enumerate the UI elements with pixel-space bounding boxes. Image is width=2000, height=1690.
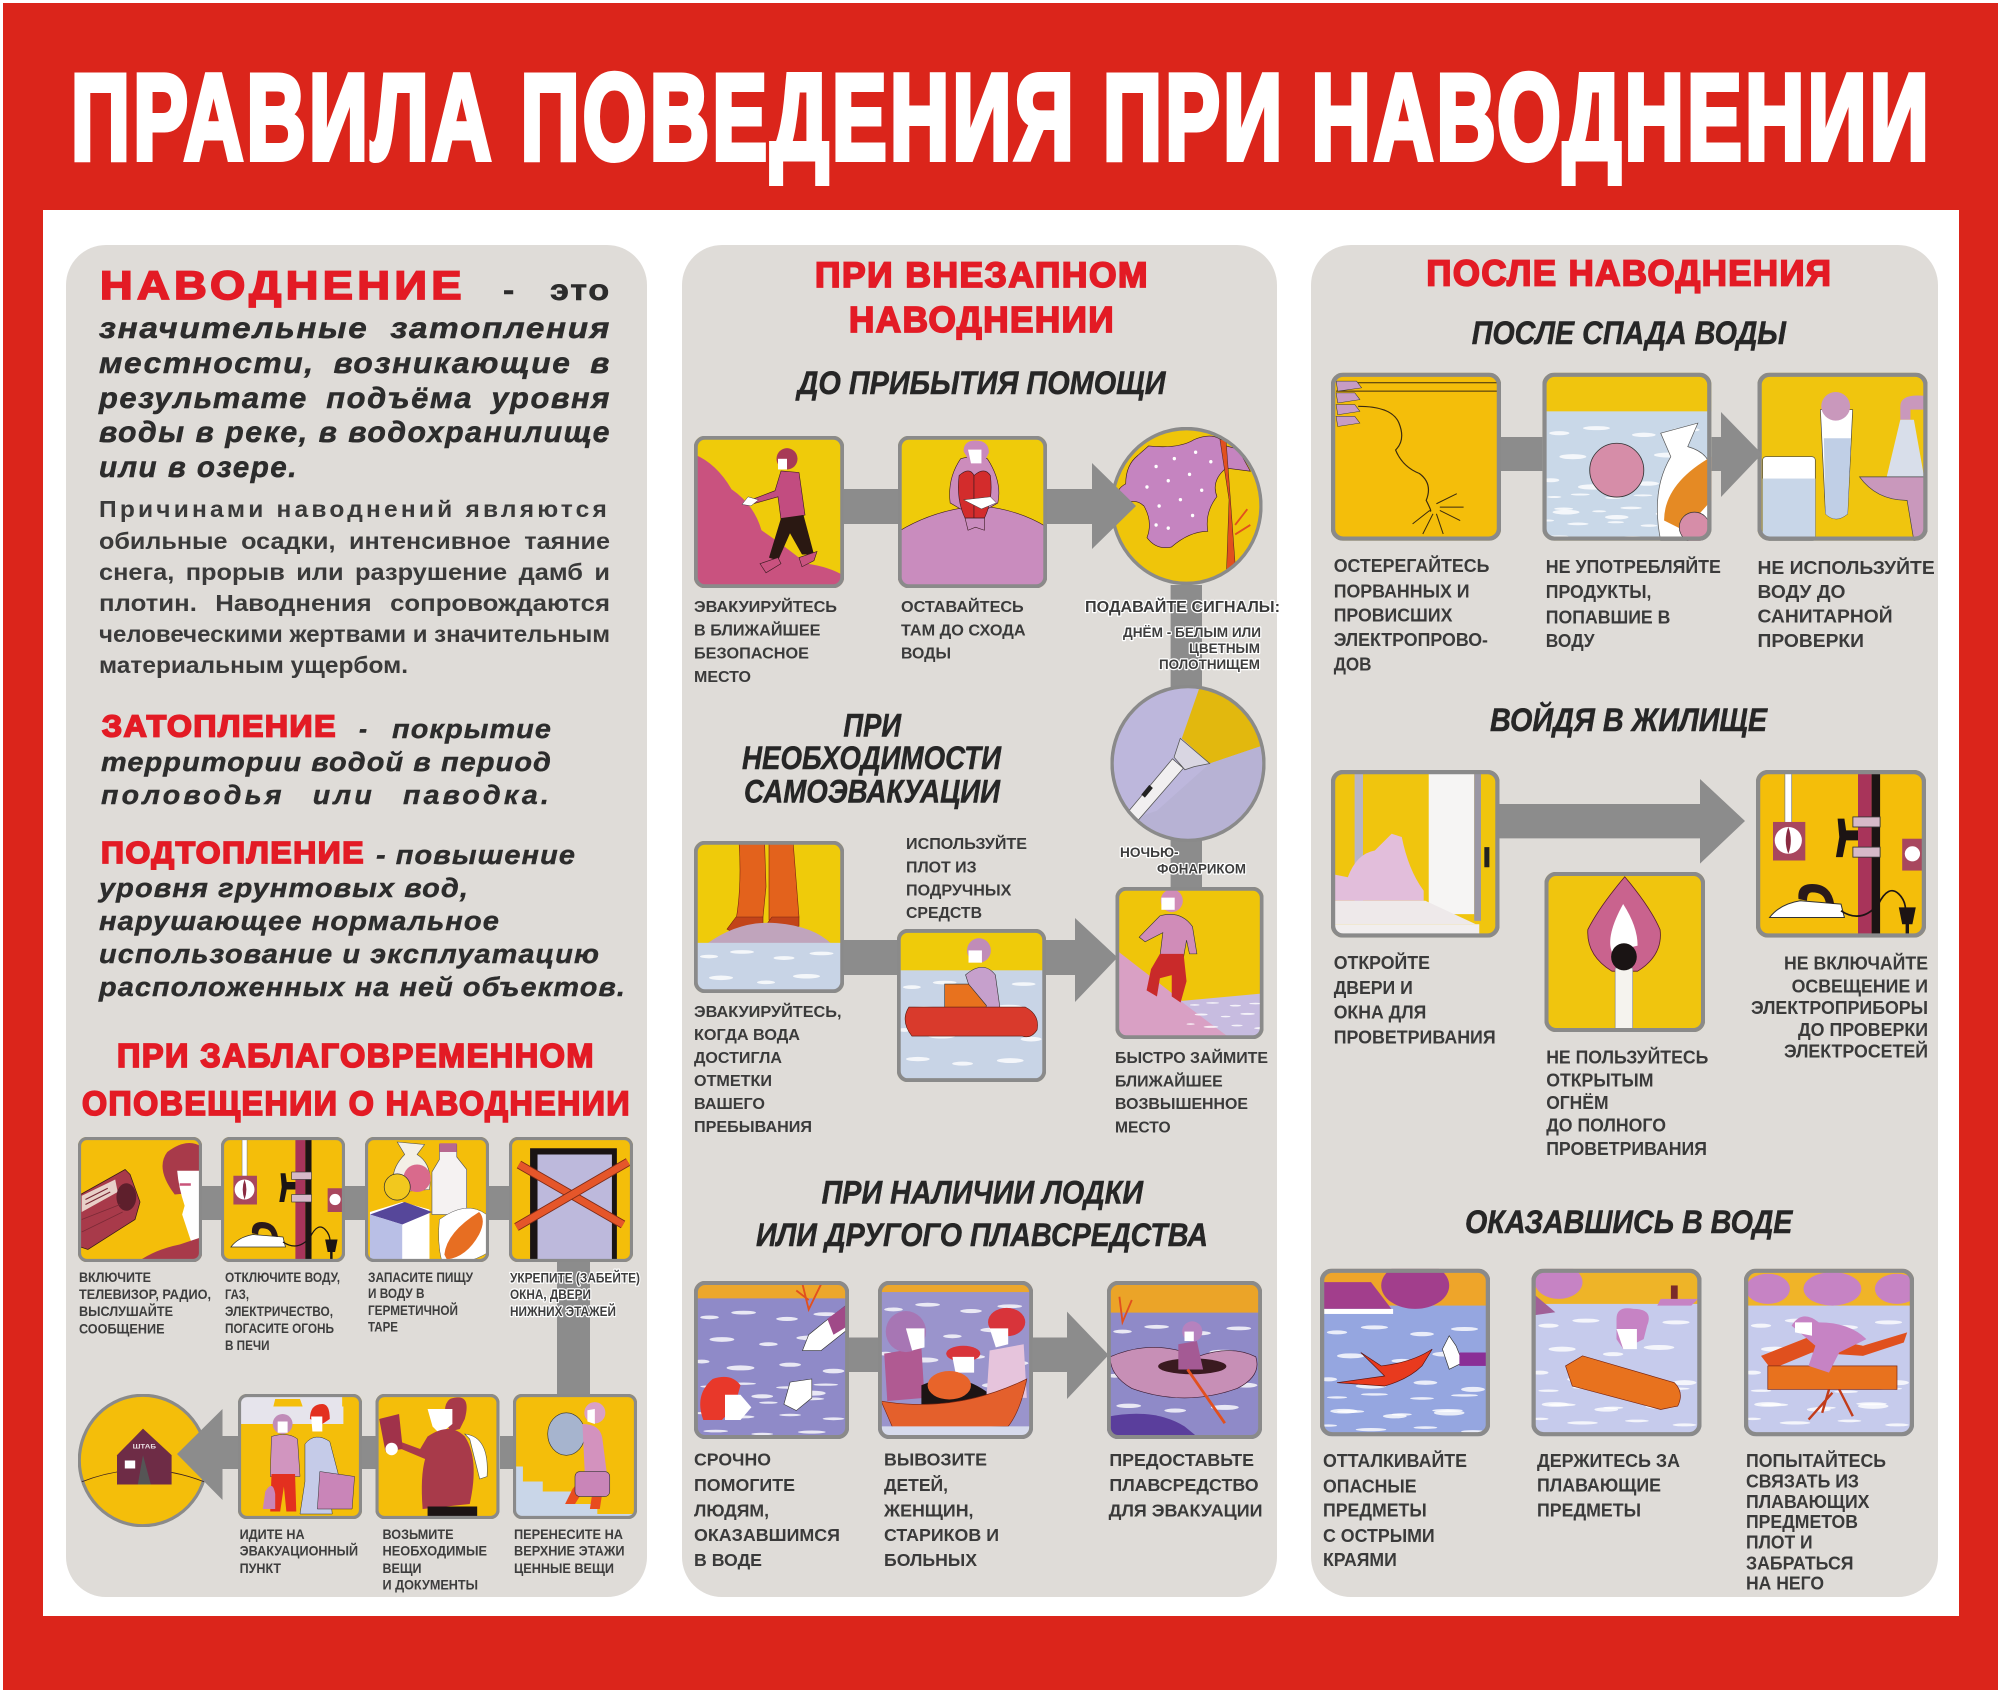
captions: evacuation point: ПУНКТ	[240, 1560, 282, 1576]
captions: provide craft: ПРЕДОСТАВЬТЕ	[1109, 1450, 1254, 1470]
captions: evacuate when water reaches: КОГДА ВОДА	[694, 1027, 800, 1044]
captions: stay: ТАМ ДО СХОДА	[901, 622, 1026, 640]
definition: flood: -	[503, 274, 516, 307]
captions: raft: ПРЕДМЕТОВ	[1746, 1512, 1858, 1532]
heading: sudden flood: НАВОДНЕНИИ	[849, 299, 1115, 340]
icon: food and water supply	[365, 1137, 489, 1262]
captions: signals by day: ЦВЕТНЫМ	[1189, 640, 1260, 656]
icon: signal flag	[1114, 427, 1262, 585]
definition: inundation: ЗАТОПЛЕНИЕ	[102, 708, 337, 744]
captions: signals by day: ПОЛОТНИЩЕМ	[1159, 656, 1260, 672]
heading: advance warning: ОПОВЕЩЕНИИ О НАВОДНЕНИИ	[82, 1085, 631, 1123]
captions: radio: ВКЛЮЧИТЕ	[79, 1269, 151, 1285]
captions: stay: ВОДЫ	[901, 646, 951, 662]
subheading: when in water: ОКАЗАВШИСЬ В ВОДЕ	[1465, 1204, 1794, 1240]
subheading: boat available	[756, 1175, 1208, 1253]
icon: match flame	[1544, 872, 1705, 1032]
icon: switch off utilities	[221, 1137, 345, 1262]
captions: documents: ВЕЩИ	[382, 1560, 422, 1576]
captions: help people: В ВОДЕ	[694, 1550, 762, 1570]
captions: take out children: СТАРИКОВ И	[884, 1525, 999, 1545]
captions: evacuation point: ЭВАКУАЦИОННЫЙ	[240, 1542, 358, 1558]
captions: water	[1758, 557, 1935, 651]
icon: contaminated food	[1542, 372, 1712, 541]
icon: legs at water edge	[694, 841, 844, 993]
icon: walk to safety	[694, 436, 844, 588]
arrows: before help	[844, 463, 1136, 549]
icon: torn wires	[1331, 372, 1501, 541]
captions: appliances: ДО ПРОВЕРКИ	[1798, 1020, 1928, 1040]
captions: raft: ЗАБРАТЬСЯ	[1746, 1553, 1854, 1573]
captions: raft: НА НЕГО	[1746, 1574, 1824, 1594]
captions: water: НЕ ИСПОЛЬЗУЙТЕ	[1758, 557, 1935, 578]
captions: push away: ОТТАЛКИВАЙТЕ	[1323, 1450, 1467, 1471]
heading: after the flood: ПОСЛЕ НАВОДНЕНИЯ	[1426, 252, 1832, 293]
captions: walk to safety: ЭВАКУИРУЙТЕСЬ	[694, 597, 837, 616]
captions: wires: ПОРВАННЫХ И	[1334, 581, 1470, 601]
captions: door: ОКНА, ДВЕРИ	[510, 1286, 591, 1302]
subheading: self-evacuation: ПРИ	[843, 708, 902, 744]
captions: valuables: ЦЕННЫЕ ВЕЩИ	[514, 1560, 614, 1576]
icon: push away sharp objects	[1320, 1268, 1490, 1436]
captions: raft	[1746, 1450, 1886, 1594]
captions: raft: ПЛОТ И	[1746, 1532, 1813, 1552]
heading: advance warning	[82, 1037, 631, 1123]
captions: food: ПОПАВШИЕ В	[1546, 607, 1670, 627]
captions: signals by day: ПОДАВАЙТЕ СИГНАЛЫ:	[1085, 597, 1280, 616]
subheading: self-evacuation: САМОЭВАКУАЦИИ	[744, 774, 1001, 810]
captions: wires: ОСТЕРЕГАЙТЕСЬ	[1334, 555, 1489, 576]
text block: causes: плотин. Наводнения сопровождаются	[99, 590, 610, 616]
connector: top row to bottom row	[202, 1186, 590, 1394]
captions: food: НЕ УПОТРЕБЛЯЙТЕ	[1546, 556, 1721, 577]
captions: window: ОТКРОЙТЕ	[1334, 952, 1430, 973]
captions: help people: ПОМОГИТЕ	[694, 1475, 795, 1495]
icon: take documents and belongings	[376, 1394, 500, 1519]
captions: window: ПРОВЕТРИВАНИЯ	[1334, 1028, 1496, 1048]
icon: walk to evacuation point	[238, 1394, 362, 1519]
text block: causes: материальным ущербом.	[99, 652, 408, 678]
captions: raft: ПЛАВАЮЩИХ	[1746, 1492, 1870, 1512]
captions: wires: ЭЛЕКТРОПРОВО-	[1334, 630, 1488, 650]
definition: inundation	[101, 708, 552, 810]
icon: headquarters tent	[78, 1394, 205, 1527]
captions: high ground: БЫСТРО ЗАЙМИТЕ	[1115, 1048, 1268, 1067]
captions: door	[510, 1268, 640, 1319]
captions: food: ТАРЕ	[368, 1318, 398, 1334]
icon: raft log	[897, 929, 1046, 1082]
subheading: after water recedes: ПОСЛЕ СПАДА ВОДЫ	[1472, 315, 1787, 351]
captions: radio: СООБЩЕНИЕ	[79, 1320, 164, 1336]
captions: evacuate when water reaches: ВАШЕГО	[694, 1096, 765, 1113]
definition: underflooding: уровня грунтовых вод,	[97, 873, 469, 903]
captions: signals by day	[1085, 597, 1280, 672]
icon: rower in inflatable boat	[1107, 1281, 1262, 1439]
definition: underflooding: расположенных на ней объектов.	[98, 972, 626, 1002]
captions: valuables: ПЕРЕНЕСИТЕ НА	[514, 1526, 623, 1542]
captions: provide craft	[1109, 1450, 1262, 1520]
captions: raft: СВЯЗАТЬ ИЗ	[1746, 1472, 1859, 1492]
captions: help people	[694, 1450, 840, 1570]
captions: help people: СРОЧНО	[694, 1450, 771, 1470]
captions: appliances: ОСВЕЩЕНИЕ И	[1792, 976, 1928, 996]
definition: underflooding: - повышение	[376, 840, 576, 870]
arrows: bottom row flow to the tent	[177, 1409, 513, 1500]
captions: raft: ПОПЫТАЙТЕСЬ	[1746, 1450, 1886, 1471]
captions: push away	[1323, 1450, 1467, 1570]
captions: high ground: БЛИЖАЙШЕЕ	[1115, 1072, 1223, 1091]
captions: radio	[79, 1269, 211, 1336]
captions: stay: ОСТАВАЙТЕСЬ	[901, 597, 1024, 616]
arrows: after water recedes	[1501, 412, 1762, 497]
panel: after the flood	[1311, 245, 1938, 1597]
captions: walk to safety: МЕСТО	[694, 669, 751, 686]
captions: utilities	[225, 1269, 340, 1353]
captions: water: ПРОВЕРКИ	[1758, 631, 1864, 651]
panel: sudden flood	[682, 245, 1280, 1597]
captions: door: УКРЕПИТЕ (ЗАБЕЙТЕ)	[510, 1268, 640, 1286]
captions: wires: ПРОВИСШИХ	[1334, 606, 1452, 626]
definition: inundation: половодья или паводка.	[101, 780, 552, 810]
captions: food: ВОДУ	[1546, 631, 1595, 651]
captions: take out children: БОЛЬНЫХ	[884, 1550, 977, 1570]
captions: walk to safety: БЕЗОПАСНОЕ	[694, 646, 809, 662]
captions: utilities: ПОГАСИТЕ ОГОНЬ	[225, 1320, 334, 1336]
definition: inundation: -	[359, 714, 368, 744]
subheading: self-evacuation: НЕОБХОДИМОСТИ	[742, 740, 1002, 776]
captions: take out children	[883, 1450, 999, 1570]
arrow: entering the home	[1500, 779, 1745, 864]
icon: boat with children	[878, 1281, 1033, 1439]
captions: high ground: ВОЗВЫШЕННОЕ	[1115, 1096, 1248, 1113]
captions: open flame	[1546, 1046, 1708, 1159]
definition: underflooding: ПОДТОПЛЕНИЕ	[101, 835, 365, 870]
captions: push away: КРАЯМИ	[1323, 1550, 1397, 1570]
captions: food: ГЕРМЕТИЧНОЙ	[368, 1301, 458, 1318]
text block: causes	[99, 496, 610, 678]
captions: help people: ЛЮДЯМ,	[694, 1500, 769, 1520]
panel: what is a flood and advance warning	[66, 245, 647, 1597]
captions: take out children: ДЕТЕЙ,	[884, 1474, 948, 1495]
captions: documents	[382, 1526, 487, 1592]
captions: evacuate when water reaches: ОТМЕТКИ	[694, 1073, 772, 1090]
white content area	[43, 210, 1959, 1616]
arrows: self-evacuation	[844, 918, 1118, 1002]
captions: signals by night	[1120, 844, 1246, 876]
captions: appliances: НЕ ВКЛЮЧАЙТЕ	[1784, 952, 1928, 973]
captions: walk to safety: В БЛИЖАЙШЕЕ	[694, 620, 821, 640]
captions: raft	[906, 834, 1027, 922]
captions: documents: И ДОКУМЕНТЫ	[382, 1576, 478, 1592]
captions: provide craft: ПЛАВСРЕДСТВО	[1109, 1475, 1259, 1495]
captions: utilities: В ПЕЧИ	[225, 1337, 270, 1353]
captions: evacuate when water reaches: ЭВАКУИРУЙТЕСЬ,	[694, 1002, 842, 1021]
captions: appliances	[1751, 952, 1928, 1062]
captions: open flame: ДО ПОЛНОГО	[1546, 1115, 1666, 1135]
captions: evacuation point: ИДИТЕ НА	[240, 1526, 305, 1542]
subheading: boat available: ИЛИ ДРУГОГО ПЛАВСРЕДСТВА	[756, 1217, 1208, 1253]
icon: boarded door	[509, 1137, 633, 1262]
captions: help people: ОКАЗАВШИМСЯ	[694, 1525, 840, 1545]
captions: water: ВОДУ ДО	[1758, 582, 1846, 602]
captions: signals by night: НОЧЬЮ-	[1120, 844, 1179, 860]
icon: do not switch on appliances	[1756, 770, 1926, 938]
captions: hold on: ПЛАВАЮЩИЕ	[1537, 1475, 1661, 1495]
icon: open window	[1331, 770, 1500, 938]
definition: flood: результате подъёма уровня	[98, 382, 611, 415]
captions: water: САНИТАРНОЙ	[1758, 606, 1893, 626]
captions: signals by day: ДНЁМ - БЕЛЫМ ИЛИ	[1123, 624, 1261, 640]
captions: open flame: ОТКРЫТЫМ	[1546, 1070, 1654, 1090]
captions: wires	[1334, 555, 1489, 675]
definition: underflooding: нарушающее нормальное	[99, 906, 500, 936]
captions: radio: ВЫСЛУШАЙТЕ	[79, 1302, 173, 1319]
captions: evacuate when water reaches	[694, 1002, 842, 1136]
icon: stay in place	[898, 436, 1047, 588]
definition: flood	[98, 264, 611, 484]
definition: flood: воды в реке, в водохранилище	[99, 416, 611, 449]
connectors: signal column	[1171, 585, 1202, 887]
icon: climb to high ground	[1116, 887, 1264, 1039]
captions: food	[368, 1269, 473, 1334]
arrows: boats	[849, 1312, 1109, 1399]
captions: raft: ПЛОТ ИЗ	[906, 860, 977, 877]
definition: flood: или в озере.	[99, 451, 298, 484]
heading: advance warning: ПРИ ЗАБЛАГОВРЕМЕННОМ	[117, 1037, 595, 1074]
icon: rescue hands	[694, 1281, 849, 1439]
captions: raft: СРЕДСТВ	[906, 905, 982, 922]
subheading: before help arrives: ДО ПРИБЫТИЯ ПОМОЩИ	[795, 365, 1166, 401]
subheading: self-evacuation	[742, 708, 1002, 810]
captions: window	[1334, 952, 1496, 1048]
captions: take out children: ВЫВОЗИТЕ	[884, 1450, 987, 1470]
captions: push away: ОПАСНЫЕ	[1323, 1476, 1417, 1496]
icon: radio and listener	[78, 1137, 202, 1262]
captions: appliances: ЭЛЕКТРОПРИБОРЫ	[1751, 998, 1928, 1018]
definition: flood: значительные затопления	[99, 312, 611, 345]
definition: flood: местности, возникающие в	[99, 347, 611, 380]
definition: underflooding	[97, 835, 626, 1002]
captions: open flame: НЕ ПОЛЬЗУЙТЕСЬ	[1546, 1046, 1708, 1068]
captions: push away: С ОСТРЫМИ	[1323, 1526, 1435, 1546]
captions: hold on	[1537, 1451, 1680, 1521]
captions: food	[1546, 556, 1721, 651]
text block: causes: снега, прорыв или разрушение дамб и	[99, 559, 610, 585]
heading: sudden flood: ПРИ ВНЕЗАПНОМ	[815, 256, 1149, 295]
captions: valuables: ВЕРХНИЕ ЭТАЖИ	[514, 1542, 624, 1558]
definition: underflooding: использование и эксплуатацию	[99, 939, 600, 969]
captions: high ground: МЕСТО	[1115, 1120, 1171, 1137]
captions: utilities: ГАЗ,	[225, 1286, 249, 1302]
subheading: entering the home: ВОЙДЯ В ЖИЛИЩЕ	[1490, 702, 1768, 738]
captions: take out children: ЖЕНЩИН,	[883, 1500, 974, 1520]
text block: causes: Причинами наводнений являются	[99, 496, 610, 522]
captions: valuables	[514, 1526, 624, 1576]
captions: walk to safety	[694, 597, 837, 686]
captions: food: ПРОДУКТЫ,	[1546, 582, 1651, 602]
captions: documents: ВОЗЬМИТЕ	[382, 1526, 454, 1542]
captions: food: И ВОДУ В	[368, 1285, 424, 1301]
captions: window: ДВЕРИ И	[1334, 978, 1413, 998]
icon: headquarters tent: ШТАБ	[133, 1444, 157, 1451]
captions: push away: ПРЕДМЕТЫ	[1323, 1501, 1427, 1521]
captions: radio: ТЕЛЕВИЗОР, РАДИО,	[79, 1286, 211, 1302]
definition: inundation: территории водой в период	[101, 747, 552, 777]
captions: signals by night: ФОНАРИКОМ	[1157, 860, 1246, 876]
icon: hold onto floating log	[1532, 1268, 1702, 1436]
captions: hold on: ПРЕДМЕТЫ	[1537, 1501, 1641, 1521]
icon: flashlight	[1110, 686, 1266, 841]
captions: provide craft: ДЛЯ ЭВАКУАЦИИ	[1109, 1500, 1262, 1520]
captions: evacuate when water reaches: ПРЕБЫВАНИЯ	[694, 1119, 812, 1136]
captions: evacuate when water reaches: ДОСТИГЛА	[694, 1050, 782, 1067]
captions: raft: ПОДРУЧНЫХ	[906, 883, 1012, 900]
captions: open flame: ОГНЁМ	[1546, 1093, 1608, 1113]
captions: utilities: ОТКЛЮЧИТЕ ВОДУ,	[225, 1269, 340, 1285]
captions: raft: ИСПОЛЬЗУЙТЕ	[906, 834, 1027, 853]
captions: high ground	[1115, 1048, 1268, 1137]
icon: improvised raft	[1744, 1268, 1914, 1436]
captions: food: ЗАПАСИТЕ ПИЩУ	[368, 1269, 473, 1285]
definition: flood: это	[550, 274, 611, 307]
captions: utilities: ЭЛЕКТРИЧЕСТВО,	[225, 1303, 333, 1319]
captions: window: ОКНА ДЛЯ	[1334, 1002, 1426, 1022]
subheading: boat available: ПРИ НАЛИЧИИ ЛОДКИ	[822, 1175, 1144, 1211]
icon: water samples	[1758, 372, 1928, 541]
icon: carry valuables upstairs	[513, 1394, 637, 1519]
captions: hold on: ДЕРЖИТЕСЬ ЗА	[1537, 1451, 1680, 1471]
captions: evacuation point	[240, 1526, 358, 1576]
captions: open flame: ПРОВЕТРИВАНИЯ	[1546, 1139, 1707, 1159]
captions: wires: ДОВ	[1334, 655, 1372, 675]
captions: door: НИЖНИХ ЭТАЖЕЙ	[510, 1302, 616, 1319]
captions: stay	[901, 597, 1026, 662]
captions: documents: НЕОБХОДИМЫЕ	[382, 1542, 487, 1558]
definition: flood: НАВОДНЕНИЕ	[100, 264, 466, 308]
captions: appliances: ЭЛЕКТРОСЕТЕЙ	[1784, 1040, 1928, 1062]
text block: causes: обильные осадки, интенсивное таяние	[99, 528, 610, 554]
definition: inundation: покрытие	[392, 714, 552, 744]
text block: causes: человеческими жертвами и значительным	[99, 621, 610, 647]
heading: sudden flood	[815, 256, 1149, 340]
